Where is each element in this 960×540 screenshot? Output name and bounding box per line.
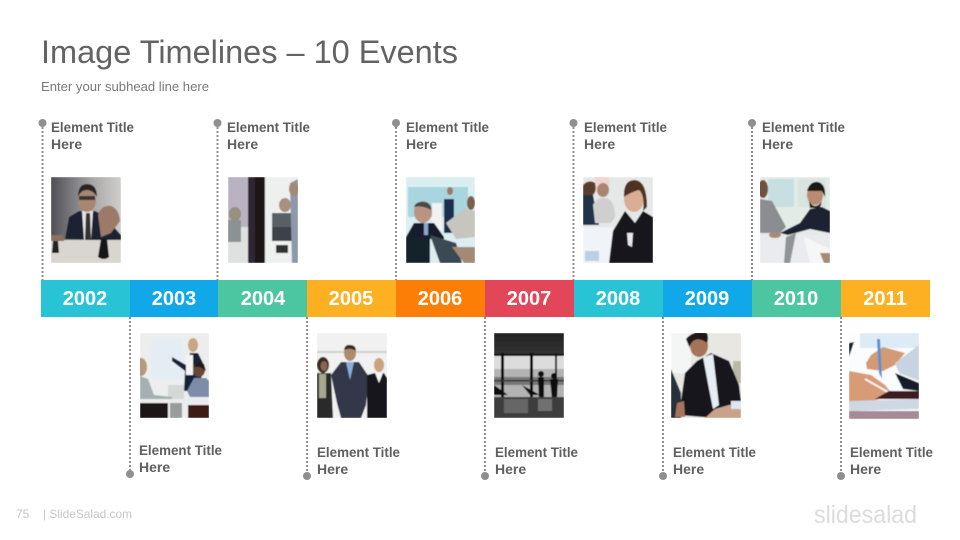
year 2003 [130,280,218,317]
label: 2004: Here [227,136,258,152]
photo: hands signing a document [849,333,919,419]
title: Image Timelines – 10 Events [41,34,458,70]
label: 2011: Here [850,461,881,477]
label: 2011: Element Title [850,444,933,460]
year 2009: 2009 [685,288,729,310]
footer brand text: | SlideSalad.com [43,507,132,521]
label: 2003: Element Title [139,442,222,458]
timeline bar [41,280,930,317]
label: 2008: Here [584,136,615,152]
photo: two men at a paperwork meeting [760,177,830,263]
connector: 2010 [748,119,756,280]
year 2002 [41,280,130,317]
year 2011: 2011 [863,288,907,310]
page number: 75 [16,507,30,521]
year 2010 [752,280,841,317]
label: 2002: Here [51,136,82,152]
connector: 2003 [126,317,134,478]
label: 2004: Element Title [227,119,310,135]
photo: three business people walking [317,333,387,418]
photo: presenter at whiteboard [140,333,209,418]
year 2010: 2010 [774,288,818,310]
label: 2008: Element Title [584,119,667,135]
label: 2010: Element Title [762,119,845,135]
label: 2010: Here [762,136,793,152]
year 2002: 2002 [63,288,107,310]
label: 2007: Element Title [495,444,578,460]
label: 2006: Here [406,136,437,152]
photo: businessman moving chess piece [51,177,121,263]
label: 2002: Element Title [51,119,134,135]
photo: colleagues reviewing a laptop [406,177,475,263]
label: 2005: Element Title [317,444,400,460]
year 2006 [396,280,485,317]
label: 2005: Here [317,461,348,477]
logo wordmark: slidesalad [814,501,917,529]
connector: 2007 [481,317,489,480]
year 2006: 2006 [418,288,462,310]
year 2007 [485,280,574,317]
year 2007: 2007 [507,288,551,310]
photo: businesswoman shaking hands [671,333,741,418]
year 2005: 2005 [329,288,373,310]
connector: 2006 [392,119,400,280]
connector: 2008 [570,119,578,280]
label: 2009: Element Title [673,444,756,460]
connector: 2011 [837,317,845,480]
year 2008 [574,280,663,317]
photo: office seen past a dark pillar [228,177,298,263]
year 2003: 2003 [152,288,196,310]
year 2011 [841,280,930,317]
year 2009 [663,280,752,317]
label: 2009: Here [673,461,704,477]
photo: smiling businesswoman at meeting [583,177,653,263]
subhead: Enter your subhead line here [41,79,209,94]
connector: 2004 [214,119,222,280]
connector: 2009 [659,317,667,480]
connector: 2005 [303,317,311,480]
photo: silhouettes at office window [494,333,564,418]
label: 2006: Element Title [406,119,489,135]
year 2004: 2004 [241,288,286,310]
year 2005 [307,280,396,317]
label: 2007: Here [495,461,526,477]
year 2004 [218,280,307,317]
year 2008: 2008 [596,288,640,310]
connector: 2002 [38,119,46,280]
label: 2003: Here [139,459,170,475]
